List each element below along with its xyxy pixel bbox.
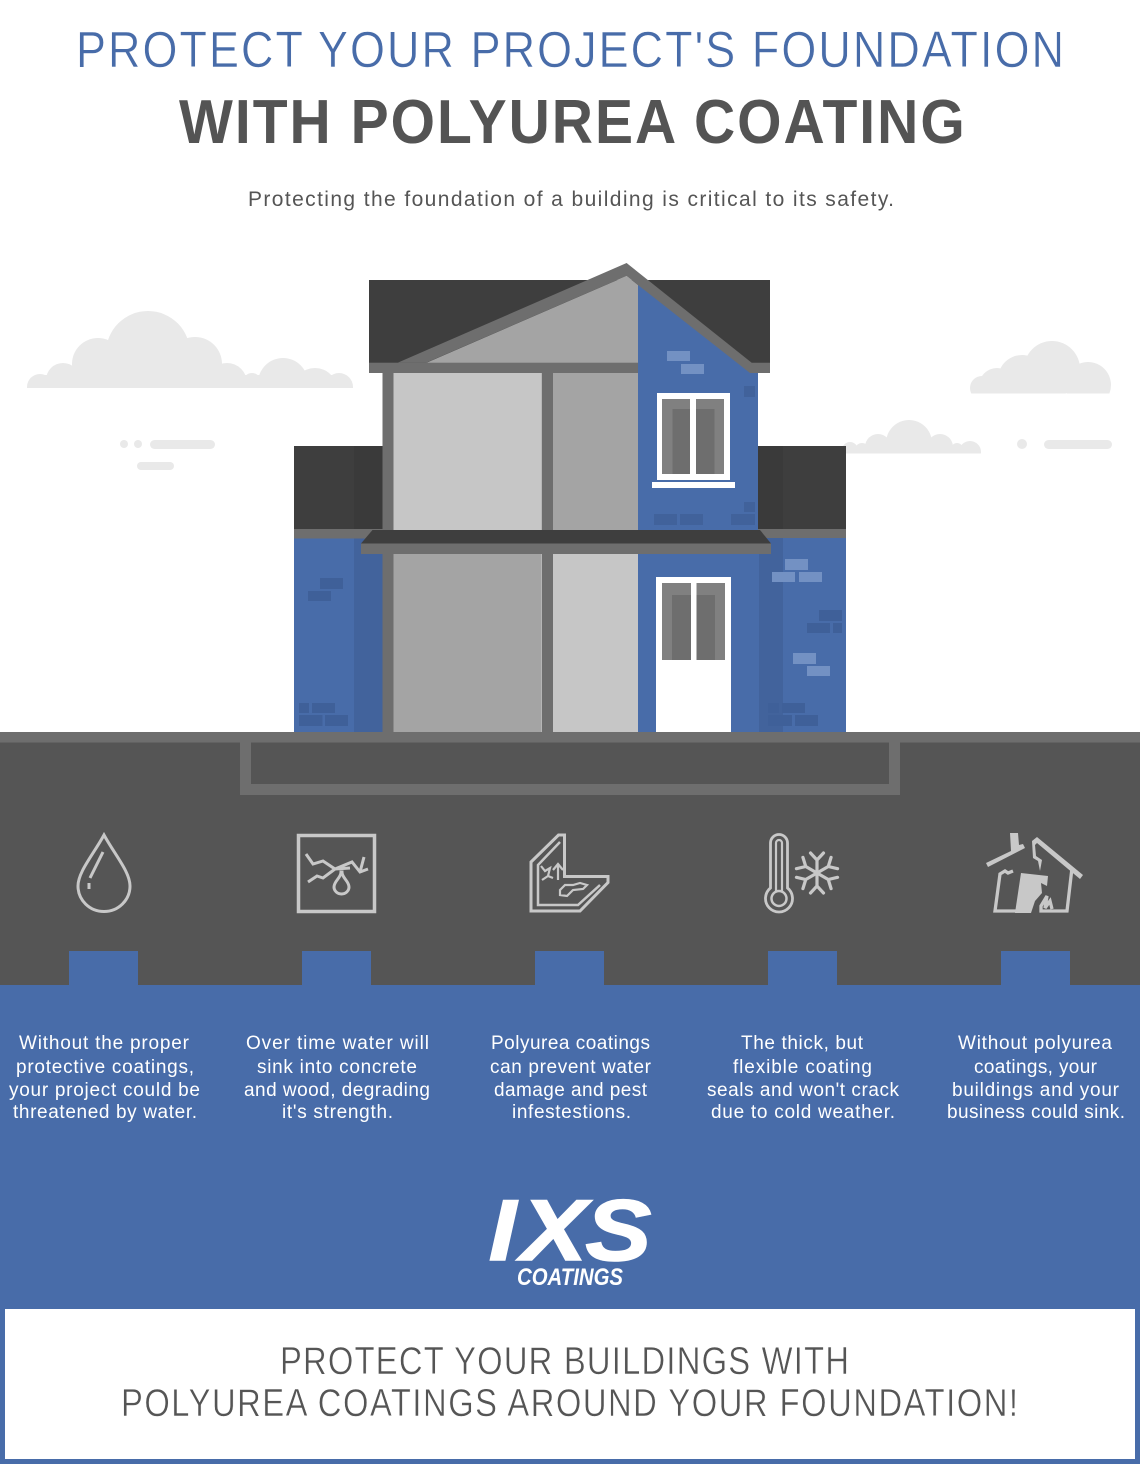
house — [294, 263, 846, 732]
cloud: large left — [27, 311, 353, 388]
upper bricks — [654, 351, 755, 525]
lower bricks — [299, 559, 842, 726]
eaves band — [294, 529, 846, 538]
callout text — [121, 1338, 1018, 1425]
sky specks left — [120, 440, 215, 470]
text: column two: sink into concrete — [257, 1057, 417, 1078]
icon: thermometer and snowflake — [766, 834, 838, 912]
icon: cracked concrete — [298, 836, 374, 912]
text: column two: Over time water will — [246, 1033, 429, 1054]
text: column three: infestestions. — [512, 1102, 631, 1123]
text: column four: due to cold weather. — [711, 1102, 895, 1123]
callout panel — [5, 1309, 1135, 1459]
text: column four: The thick, but — [741, 1033, 864, 1054]
cloud: right — [970, 341, 1111, 394]
icon: collapsing house — [986, 833, 1083, 913]
text: column five — [947, 1033, 1125, 1123]
callout text: POLYUREA COATINGS AROUND YOUR FOUNDATION! — [121, 1380, 1018, 1425]
text: column one: threatened by water. — [13, 1102, 197, 1123]
ground — [0, 742, 1140, 985]
text: column one — [9, 1033, 200, 1123]
door — [656, 577, 731, 732]
text: column two: and wood, degrading — [244, 1080, 430, 1101]
porch roof — [361, 530, 771, 554]
text: column five: coatings, your — [974, 1057, 1098, 1078]
text: column three: can prevent water — [490, 1057, 652, 1078]
text: column one: your project could be — [9, 1080, 200, 1101]
upper wall cutaway panels — [369, 276, 638, 530]
icon: water drop — [78, 835, 130, 912]
text: column five: Without polyurea — [958, 1033, 1112, 1054]
upper blue wall — [638, 283, 758, 530]
gable trim — [398, 263, 770, 373]
icon: protected corner — [531, 835, 608, 911]
foundation outline — [240, 742, 900, 795]
text: column three — [490, 1033, 652, 1123]
text: column four: seals and won't crack — [707, 1080, 900, 1101]
text: column four — [707, 1033, 900, 1123]
text: column one: Without the proper — [19, 1033, 190, 1054]
title line two: WITH POLYUREA COATING — [179, 87, 965, 157]
text: column three: damage and pest — [494, 1080, 648, 1101]
main roof — [369, 280, 770, 373]
upper window — [652, 393, 735, 488]
blue panel — [0, 951, 1140, 1464]
text: column five: business could sink. — [947, 1102, 1125, 1123]
lower walls — [294, 530, 846, 732]
logo: COATINGS — [517, 1264, 623, 1291]
sky specks right — [1017, 439, 1112, 449]
text: column two — [244, 1033, 430, 1123]
text: column four: flexible coating — [733, 1057, 872, 1078]
ground line — [0, 732, 1140, 742]
text: column three: Polyurea coatings — [491, 1033, 650, 1054]
text: column two: it's strength. — [282, 1102, 393, 1123]
title line one: PROTECT YOUR PROJECT'S FOUNDATION — [76, 22, 1064, 79]
side roofs — [294, 446, 846, 530]
text: column one: protective coatings, — [16, 1057, 194, 1078]
logo: IXS — [489, 1182, 651, 1279]
cloud: small right — [843, 420, 981, 454]
subtitle: Protecting the foundation of a building is critical to its safety. — [248, 188, 894, 211]
callout text: PROTECT YOUR BUILDINGS WITH — [280, 1338, 849, 1383]
text: column five: buildings and your — [952, 1080, 1120, 1101]
